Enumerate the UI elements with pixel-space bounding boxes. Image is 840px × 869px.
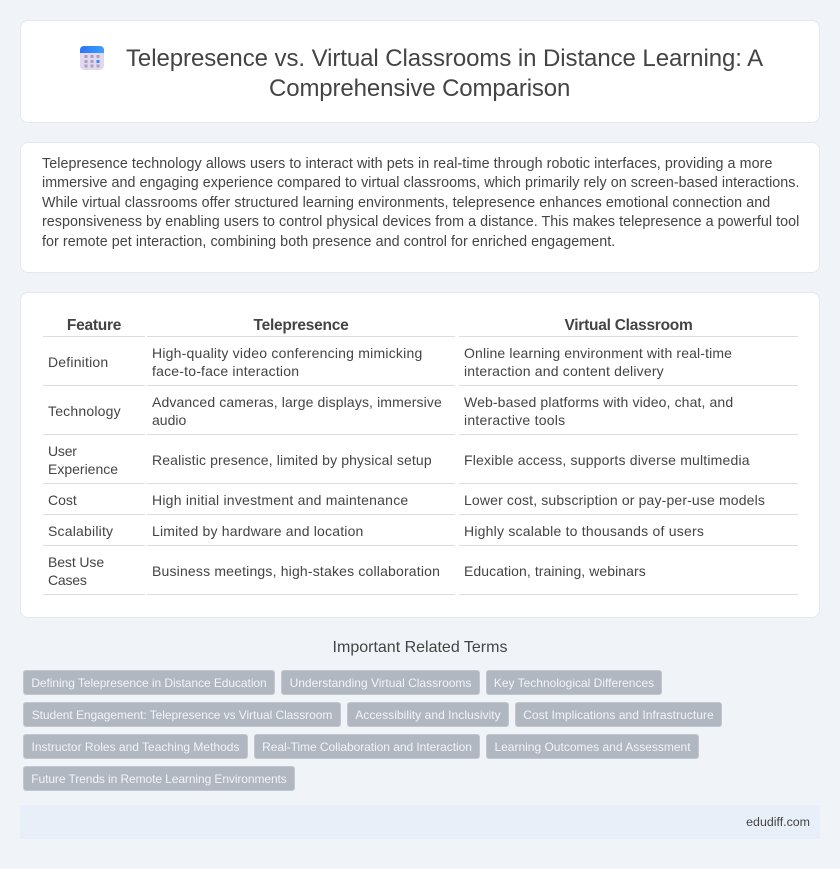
related terms tags: Instructor Roles and Teaching Methods xyxy=(32,740,239,754)
related terms tags: Student Engagement: Telepresence vs Virtual Classroom xyxy=(32,708,332,722)
related terms tags: Cost Implications and Infrastructure xyxy=(523,708,714,722)
related terms tags xyxy=(23,670,722,791)
row: definition xyxy=(48,345,732,379)
title: Telepresence vs. Virtual Classrooms in Distance Learning: A xyxy=(126,45,763,72)
row: definition: High-quality video conferencing mimicking xyxy=(152,345,422,361)
row: best use cases: Cases xyxy=(48,572,87,588)
row: best use cases: Education, training, webinars xyxy=(464,563,646,579)
table header row: Feature xyxy=(67,317,121,334)
title: Comprehensive Comparison xyxy=(269,75,570,102)
row: technology: audio xyxy=(152,412,186,428)
row: user experience: Realistic presence, limited by physical setup xyxy=(152,452,432,468)
heading: related terms: Important Related Terms xyxy=(333,639,507,656)
row: technology: Web-based platforms with video, chat, and xyxy=(464,394,733,410)
row: definition: Definition xyxy=(48,354,108,370)
row: technology: Technology xyxy=(48,403,121,419)
row: technology xyxy=(48,394,733,428)
related terms tags: Accessibility and Inclusivity xyxy=(355,708,501,722)
row: best use cases: Best Use xyxy=(48,554,104,570)
footer xyxy=(20,805,820,839)
table header row: Telepresence xyxy=(254,317,348,334)
row: user experience: Flexible access, supports diverse multimedia xyxy=(464,452,750,468)
title xyxy=(126,45,763,102)
row: technology: Advanced cameras, large displays, immersive xyxy=(152,394,442,410)
row: user experience: User xyxy=(48,443,77,459)
panel: introduction text: responsiveness by enabling users to control physical devices from a distance. This makes telepresence a powerful tool xyxy=(42,214,799,230)
row: cost: Cost xyxy=(48,492,77,508)
footer: edudiff.com xyxy=(746,815,810,829)
table header row xyxy=(67,317,693,334)
row: definition: interaction and content delivery xyxy=(464,363,664,379)
related terms tags: Key Technological Differences xyxy=(494,676,654,690)
panel: introduction text: Telepresence technology allows users to interact with pets in real-time through robotic interfaces, providing a more xyxy=(42,156,772,172)
related terms tags: Future Trends in Remote Learning Environments xyxy=(31,772,287,786)
row: scalability xyxy=(48,523,704,539)
panel: introduction text: for remote pet interaction, combining both presence and control for enriched engagement. xyxy=(42,234,615,250)
related terms tags: Defining Telepresence in Distance Education xyxy=(31,676,267,690)
row: scalability: Highly scalable to thousands of users xyxy=(464,523,704,539)
related terms tags: Understanding Virtual Classrooms xyxy=(290,676,471,690)
row: best use cases: Business meetings, high-stakes collaboration xyxy=(152,563,440,579)
row: cost xyxy=(48,492,765,508)
row: cost: Lower cost, subscription or pay-per-use models xyxy=(464,492,765,508)
related terms tags: Learning Outcomes and Assessment xyxy=(494,740,691,754)
panel: comparison table xyxy=(20,292,820,618)
row: user experience: Experience xyxy=(48,461,118,477)
panel: introduction text: While virtual classrooms offer structured learning environments, telepresence enhances emotional connection and xyxy=(42,195,770,211)
related terms tags: Real-Time Collaboration and Interaction xyxy=(262,740,472,754)
row: technology: interactive tools xyxy=(464,412,565,428)
row: definition: Online learning environment with real-time xyxy=(464,345,732,361)
row: user experience xyxy=(48,443,750,477)
row: definition: face-to-face interaction xyxy=(152,363,299,379)
panel: header xyxy=(20,20,820,123)
icon: calendar xyxy=(80,46,104,70)
row: cost: High initial investment and maintenance xyxy=(152,492,408,508)
row: best use cases xyxy=(48,554,646,588)
panel: introduction text xyxy=(20,142,820,273)
row: scalability: Scalability xyxy=(48,523,113,539)
table header row: Virtual Classroom xyxy=(564,317,693,334)
panel: introduction text: immersive and engaging experience compared to virtual classrooms, which primarily rely on screen-based interactions. xyxy=(42,175,800,191)
row: scalability: Limited by hardware and location xyxy=(152,523,364,539)
